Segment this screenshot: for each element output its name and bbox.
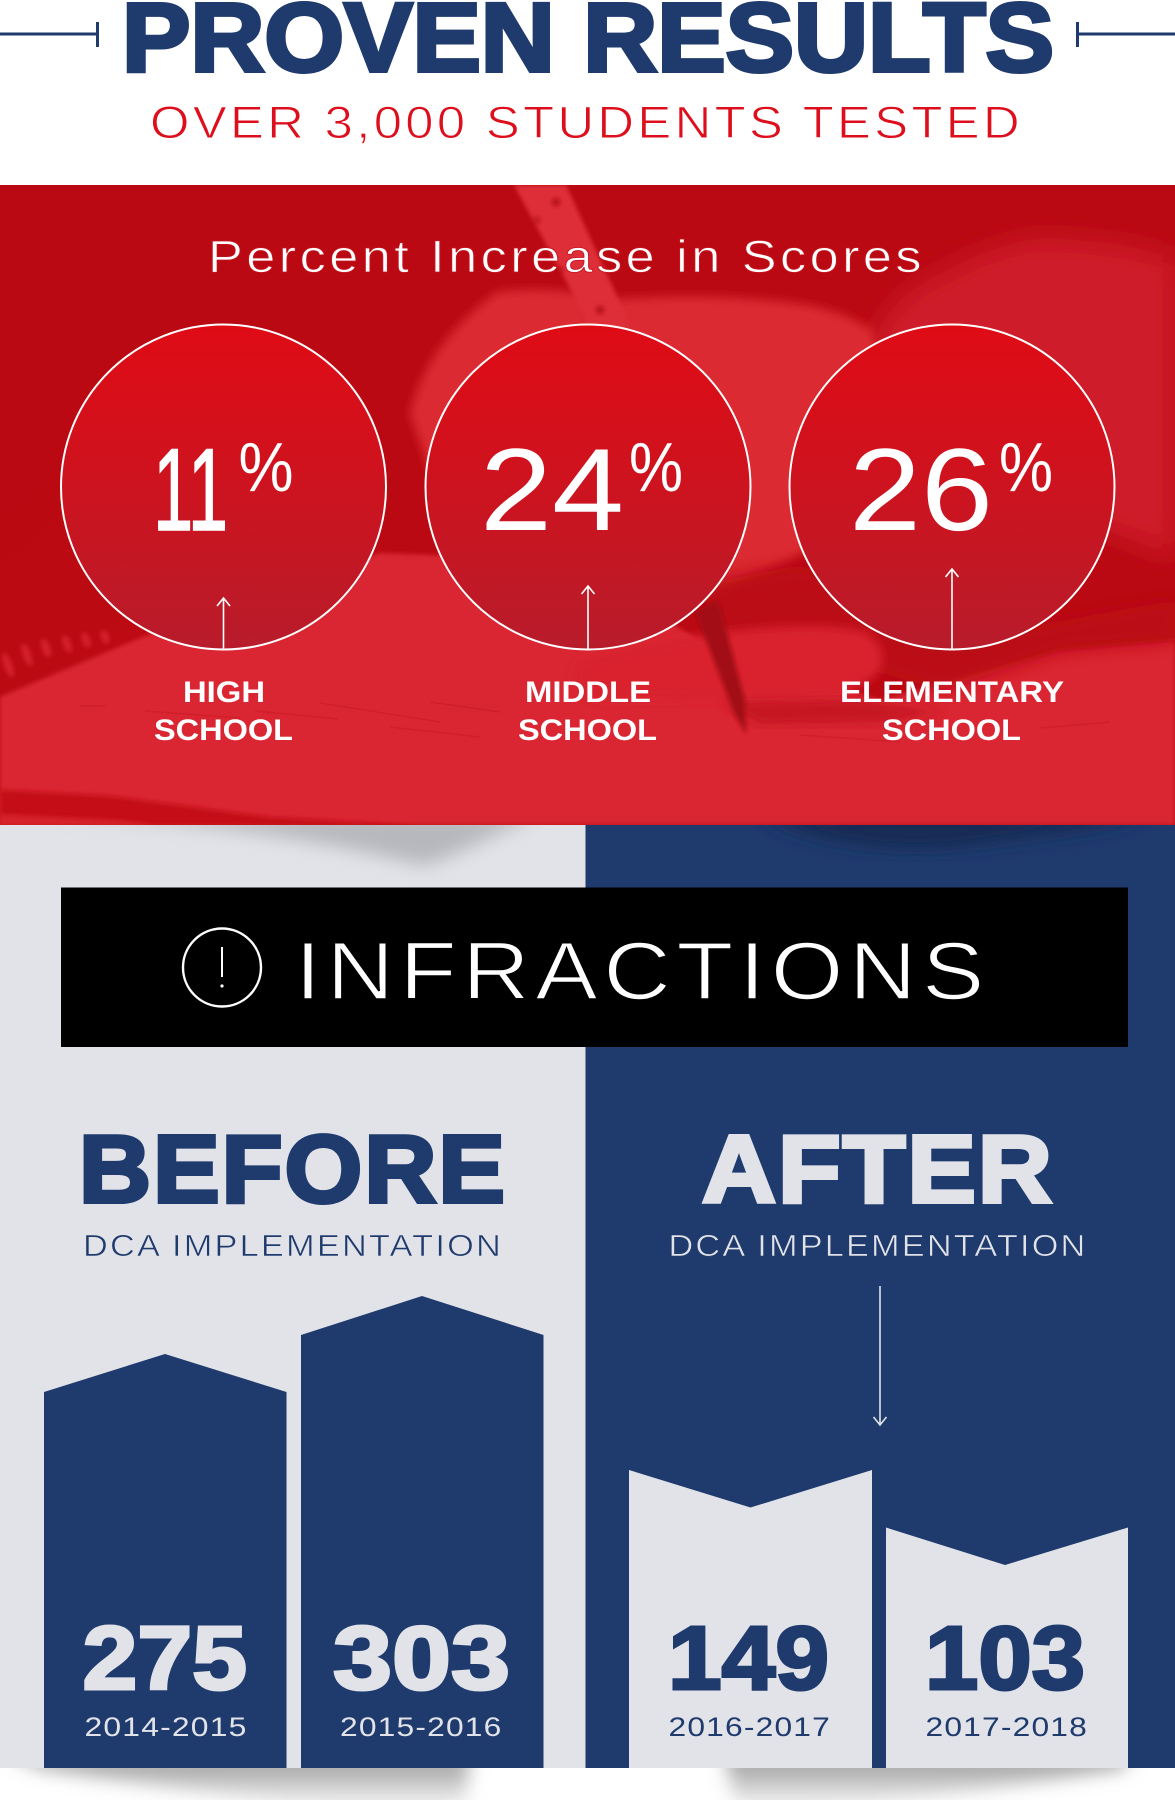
percent sign: %: [999, 428, 1053, 506]
bar 2017-2018: [886, 1528, 1128, 1768]
header rule right: [1076, 22, 1175, 47]
percent sign: %: [629, 428, 683, 506]
arrow: [946, 569, 958, 649]
arrow: [582, 586, 594, 649]
pencil tip: [695, 600, 746, 734]
heading: percent increase in scores: Percent Increase in Scores: [208, 231, 925, 282]
year: 2014-2015: [84, 1712, 248, 1742]
value: 24: [480, 424, 624, 555]
arrow: [217, 598, 230, 649]
year: 2017-2018: [926, 1712, 1088, 1742]
stat: high school 11%: [61, 324, 386, 747]
bottom page shadow: [16, 1768, 1135, 1800]
subtitle: OVER 3,000 STUDENTS TESTED: [150, 97, 1023, 148]
photo background: hand writing on notebook: [0, 185, 1175, 826]
bar 2015-2016: [301, 1296, 544, 1768]
bar 2016-2017: [629, 1470, 872, 1768]
stat: middle school 24%: [426, 324, 750, 747]
pencil eraser dots: [534, 198, 604, 314]
year: 2015-2016: [340, 1712, 502, 1742]
shadow under fingers: [720, 700, 945, 724]
bottom swoosh: [0, 790, 420, 826]
main hand: [410, 290, 888, 600]
header rule left: [0, 22, 99, 47]
grey background: [0, 825, 586, 1768]
value 103: 103: [925, 1609, 1085, 1709]
label: [518, 676, 657, 747]
percent sign: %: [238, 428, 294, 506]
fingers: [693, 623, 884, 690]
value 149: 149: [668, 1609, 829, 1709]
icon: exclamation in circle: [183, 928, 261, 1006]
shadow under hand: [700, 565, 1175, 690]
label: ELEMENTARY: [840, 676, 1064, 709]
value 303: 303: [333, 1609, 510, 1709]
label: [154, 676, 293, 747]
circle: [426, 324, 750, 650]
panel: percent increase in scores: [0, 185, 1175, 826]
BEFORE heading: BEFORE: [79, 1116, 507, 1223]
notebook spiral: [0, 629, 111, 679]
stat: elementary school 26%: [790, 324, 1114, 747]
black bar: [61, 888, 1128, 1047]
value: 11: [153, 424, 228, 555]
label: SCHOOL: [518, 714, 657, 747]
label: MIDDLE: [525, 676, 651, 709]
pencil writing marks: [80, 702, 1110, 742]
paper: [0, 553, 1175, 825]
circle: [790, 324, 1114, 650]
header: [0, 0, 1175, 148]
arrow: downward: [874, 1286, 886, 1425]
pencil: [514, 185, 620, 307]
shadows under the red panel: [148, 825, 1116, 872]
panel: after: [586, 825, 1175, 1768]
bar 2014-2015: [44, 1354, 286, 1768]
panel: before: [0, 825, 586, 1768]
label: SCHOOL: [154, 714, 293, 747]
label: SCHOOL: [882, 714, 1021, 747]
banner: infractions: [61, 888, 1128, 1047]
heading: INFRACTIONS: [295, 926, 990, 1017]
subheading: DCA IMPLEMENTATION: [83, 1228, 503, 1263]
value 275: 275: [82, 1609, 247, 1709]
year: 2016-2017: [668, 1712, 831, 1742]
navy background: [586, 825, 1175, 1768]
AFTER heading: AFTER: [702, 1116, 1054, 1223]
label: [840, 676, 1064, 747]
far hand: [872, 238, 1175, 560]
label: HIGH: [183, 676, 265, 709]
subheading: DCA IMPLEMENTATION: [668, 1228, 1088, 1263]
circle: [61, 324, 386, 650]
value: 26: [849, 424, 993, 555]
